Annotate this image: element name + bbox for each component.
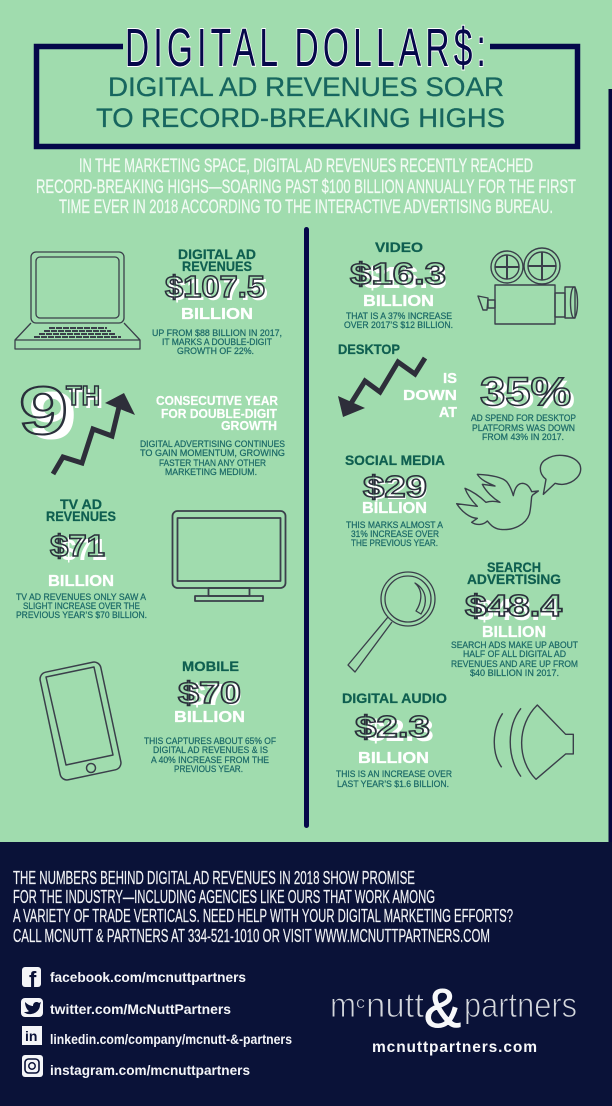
- description: IT MARKS A DOUBLE-DIGIT: [162, 337, 272, 348]
- description: [451, 640, 578, 679]
- billion label: BILLION: [358, 750, 429, 767]
- website: mcnuttpartners.com: [372, 1039, 537, 1056]
- description: THIS MARKS ALMOST A: [346, 520, 444, 531]
- number: 35%: [480, 370, 571, 414]
- number: 9th: TH: [66, 380, 100, 411]
- panel: mobile: [39, 658, 276, 781]
- logo: mcnutt and partners: nutt: [366, 986, 424, 1025]
- panel: digital ad revenues: [15, 246, 282, 357]
- panel: video: [344, 239, 578, 331]
- facebook link: facebook.com/mcnuttpartners: [50, 970, 246, 985]
- description: SEARCH ADS MAKE UP ABOUT: [451, 640, 578, 651]
- number: $29: [366, 471, 428, 506]
- panel: footer: [0, 842, 612, 1106]
- label: is down at: DOWN: [403, 387, 457, 404]
- description: PREVIOUS YEAR.: [174, 764, 243, 775]
- number: $70: [178, 675, 241, 710]
- icon: linkedin: [22, 1026, 42, 1045]
- number: $16.3: [350, 256, 446, 291]
- number: $70: [188, 677, 242, 712]
- description: GROWTH OF 22%.: [177, 346, 254, 357]
- heading: CONSECUTIVE YEAR: [156, 393, 279, 408]
- icon: laptop: [15, 252, 140, 349]
- description: FASTER THAN ANY OTHER: [159, 458, 266, 469]
- description: [344, 311, 453, 331]
- description: LAST YEAR’S $1.6 BILLION.: [337, 779, 449, 790]
- description: [336, 769, 452, 790]
- heading: [467, 559, 561, 587]
- heading: [178, 246, 256, 274]
- label: is down at: [403, 370, 457, 421]
- number: $2.3: [366, 713, 434, 748]
- instagram link: instagram.com/mcnuttpartners: [50, 1063, 250, 1078]
- description: $40 BILLION IN 2017.: [470, 668, 559, 679]
- description: TO GAIN MOMENTUM, GROWING: [140, 448, 285, 459]
- heading: [46, 496, 116, 524]
- heading: VIDEO: [375, 239, 423, 255]
- description: [346, 520, 444, 549]
- number: 35%: [484, 373, 575, 417]
- logo: mcnutt and partners: m: [330, 986, 356, 1025]
- panel: digital audio: [336, 690, 573, 790]
- icon: twitter: [21, 998, 43, 1017]
- icon: rising arrow: [53, 393, 135, 474]
- description: DIGITAL ADVERTISING CONTINUES: [140, 439, 285, 450]
- description: THE PREVIOUS YEAR.: [351, 538, 438, 549]
- description: THAT IS A 37% INCREASE: [346, 311, 452, 322]
- heading: REVENUES: [46, 508, 116, 524]
- description: OVER 2017’S $12 BILLION.: [344, 320, 453, 331]
- logo: mcnutt and partners: c: [356, 993, 366, 1012]
- heading: FOR DOUBLE-DIGIT: [161, 406, 277, 421]
- description: [471, 413, 576, 443]
- number: $107.5: [165, 269, 265, 304]
- number: $2.3: [355, 709, 430, 744]
- icon: falling arrow: [338, 358, 425, 417]
- billion label: BILLION: [362, 500, 427, 517]
- icon: facebook: [22, 967, 41, 992]
- number: $48.4: [475, 592, 560, 627]
- description: MARKETING MEDIUM.: [165, 467, 257, 478]
- icon: film projector: [478, 248, 578, 324]
- number: $107.5: [168, 272, 268, 307]
- description: UP FROM $88 BILLION IN 2017,: [152, 328, 282, 339]
- heading: SOCIAL MEDIA: [345, 452, 445, 468]
- description: THIS IS AN INCREASE OVER: [336, 769, 452, 780]
- heading: ADVERTISING: [467, 571, 561, 587]
- number: $71: [61, 532, 107, 567]
- description: [16, 592, 147, 621]
- description: 31% INCREASE OVER: [351, 529, 439, 540]
- number: $16.3: [363, 260, 447, 295]
- description: SLIGHT INCREASE OVER THE: [23, 601, 140, 612]
- number: $48.4: [465, 588, 563, 623]
- description: [152, 328, 282, 357]
- heading: DIGITAL AUDIO: [342, 690, 447, 706]
- linkedin link: linkedin.com/company/mcnutt-&-partners: [50, 1032, 292, 1047]
- icon: instagram: [22, 1055, 43, 1077]
- billion label: BILLION: [482, 624, 546, 641]
- heading: GROWTH: [221, 418, 277, 433]
- heading: SEARCH: [487, 559, 541, 575]
- billion label: BILLION: [48, 573, 114, 590]
- closing text: [13, 867, 513, 946]
- description: [144, 736, 276, 775]
- number: 9th: 9: [28, 378, 77, 454]
- subtitle: TO RECORD-BREAKING HIGHS: [96, 103, 505, 133]
- subtitle: [96, 72, 505, 133]
- number: 9th: [19, 373, 103, 454]
- number: [355, 709, 434, 748]
- billion label: BILLION: [181, 306, 253, 323]
- icon: facebook: f: [29, 967, 37, 992]
- description: FROM 43% IN 2017.: [482, 432, 564, 443]
- title: Digital Dollars: DIGITAL DOLLAR$:: [125, 17, 486, 78]
- panel: desktop: [338, 341, 576, 443]
- icon: bird with speech bubble: [457, 455, 581, 530]
- heading: DIGITAL AD: [178, 246, 256, 262]
- panel: tv ad revenues: [16, 496, 286, 621]
- description: DIGITAL AD REVENUES & IS: [153, 745, 268, 756]
- description: A 40% INCREASE FROM THE: [151, 755, 269, 766]
- description: PLATFORMS WAS DOWN: [472, 423, 575, 434]
- twitter link: twitter.com/McNuttPartners: [50, 1002, 231, 1017]
- logo: mcnutt and partners: [330, 977, 577, 1039]
- panel: social media: [345, 452, 581, 549]
- heading: REVENUES: [182, 258, 252, 274]
- icon: magnifying glass: [348, 572, 435, 672]
- number: 9th: 9: [19, 373, 68, 449]
- center divider: [304, 227, 309, 828]
- panel: 9th consecutive year: [19, 373, 285, 478]
- icon: speaker: [494, 705, 573, 779]
- billion label: BILLION: [174, 709, 245, 726]
- logo: mcnutt and partners: partners: [464, 986, 577, 1025]
- label: is down at: AT: [439, 404, 457, 421]
- description: PREVIOUS YEAR’S $70 BILLION.: [16, 610, 147, 621]
- description: [140, 439, 285, 478]
- heading: TV AD: [60, 496, 102, 512]
- icon: linkedin: in: [25, 1028, 37, 1044]
- number: $71: [50, 528, 105, 563]
- logo: mcnutt and partners: &: [424, 977, 461, 1039]
- icon: television: [172, 511, 286, 601]
- subtitle: DIGITAL AD REVENUES SOAR: [108, 72, 504, 102]
- heading: DESKTOP: [338, 341, 400, 357]
- title frame: [36, 46, 578, 146]
- label: is down at: IS: [443, 370, 457, 387]
- description: HALF OF ALL DIGITAL AD: [463, 649, 566, 660]
- heading: MOBILE: [182, 658, 239, 674]
- billion label: BILLION: [363, 293, 434, 310]
- panel: search advertising: [348, 559, 578, 679]
- description: REVENUES AND ARE UP FROM: [451, 659, 578, 670]
- intro text: [36, 156, 576, 218]
- icon: smartphone: [39, 661, 122, 781]
- heading: [156, 393, 279, 433]
- number: $29: [363, 469, 427, 504]
- description: TV AD REVENUES ONLY SAW A: [16, 592, 147, 603]
- number: 9th: TH: [69, 383, 103, 414]
- description: AD SPEND FOR DESKTOP: [471, 413, 576, 424]
- description: THIS CAPTURES ABOUT 65% OF: [144, 736, 276, 747]
